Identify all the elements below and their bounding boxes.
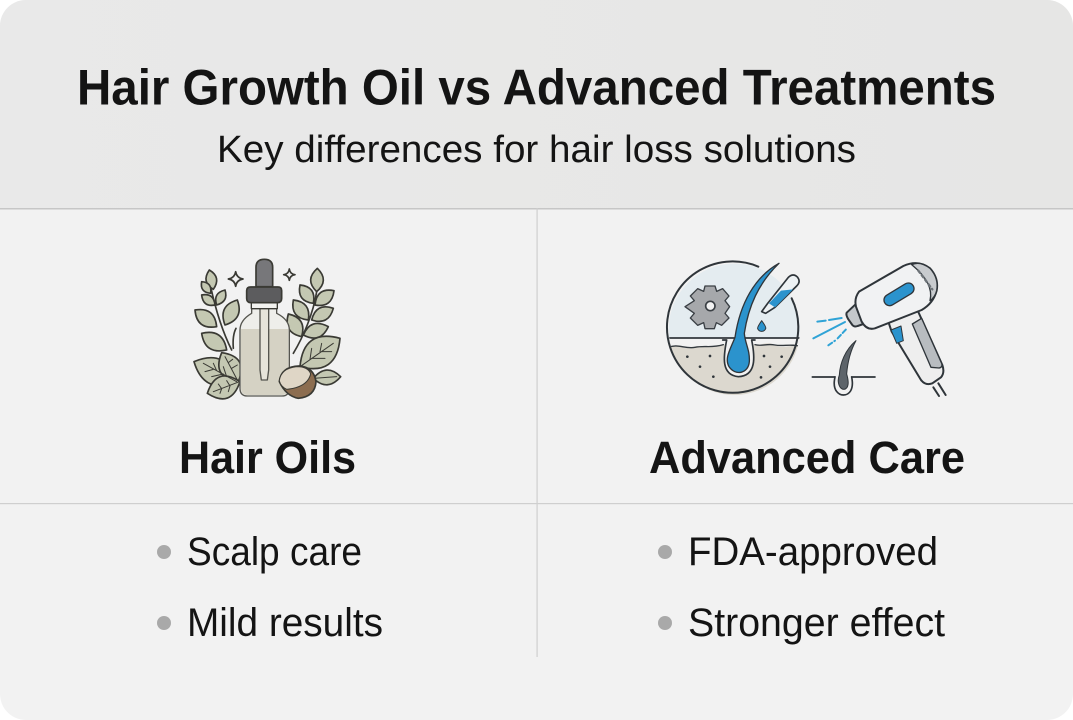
icon: scalp cross-section bbox=[665, 260, 805, 401]
icon: sparkles bbox=[228, 269, 295, 286]
icon: handheld device bbox=[846, 263, 946, 396]
list: advanced care points: FDA-approved bbox=[688, 530, 938, 574]
heading: Hair Oils: Hair Oils bbox=[179, 432, 356, 483]
subtitle: Key differences for hair loss solutions bbox=[217, 129, 856, 171]
list: hair oils points: Mild results bbox=[187, 601, 383, 645]
list: advanced care points bbox=[658, 530, 945, 645]
icon: bottle bbox=[240, 259, 289, 396]
icon: hair strand in follicle bbox=[723, 340, 755, 377]
icon: dropper bbox=[762, 275, 799, 313]
icon: herb branches bbox=[194, 268, 341, 399]
list: advanced care points: Stronger effect bbox=[688, 601, 945, 645]
icon: small hair follicle bbox=[812, 341, 875, 395]
icon: spray lines bbox=[813, 318, 847, 345]
icon: gear bbox=[685, 286, 730, 329]
list: hair oils points bbox=[157, 530, 383, 645]
title: Hair Growth Oil vs Advanced Treatments bbox=[77, 60, 996, 116]
list: hair oils points: Scalp care bbox=[187, 530, 362, 574]
icon: nut bbox=[279, 366, 316, 398]
header band bbox=[0, 0, 1073, 210]
heading: Advanced Care: Advanced Care bbox=[649, 432, 965, 483]
icon: hair follicle treatment and laser device bbox=[665, 260, 946, 401]
icon: oil dropper bottle with leaves bbox=[194, 259, 341, 399]
